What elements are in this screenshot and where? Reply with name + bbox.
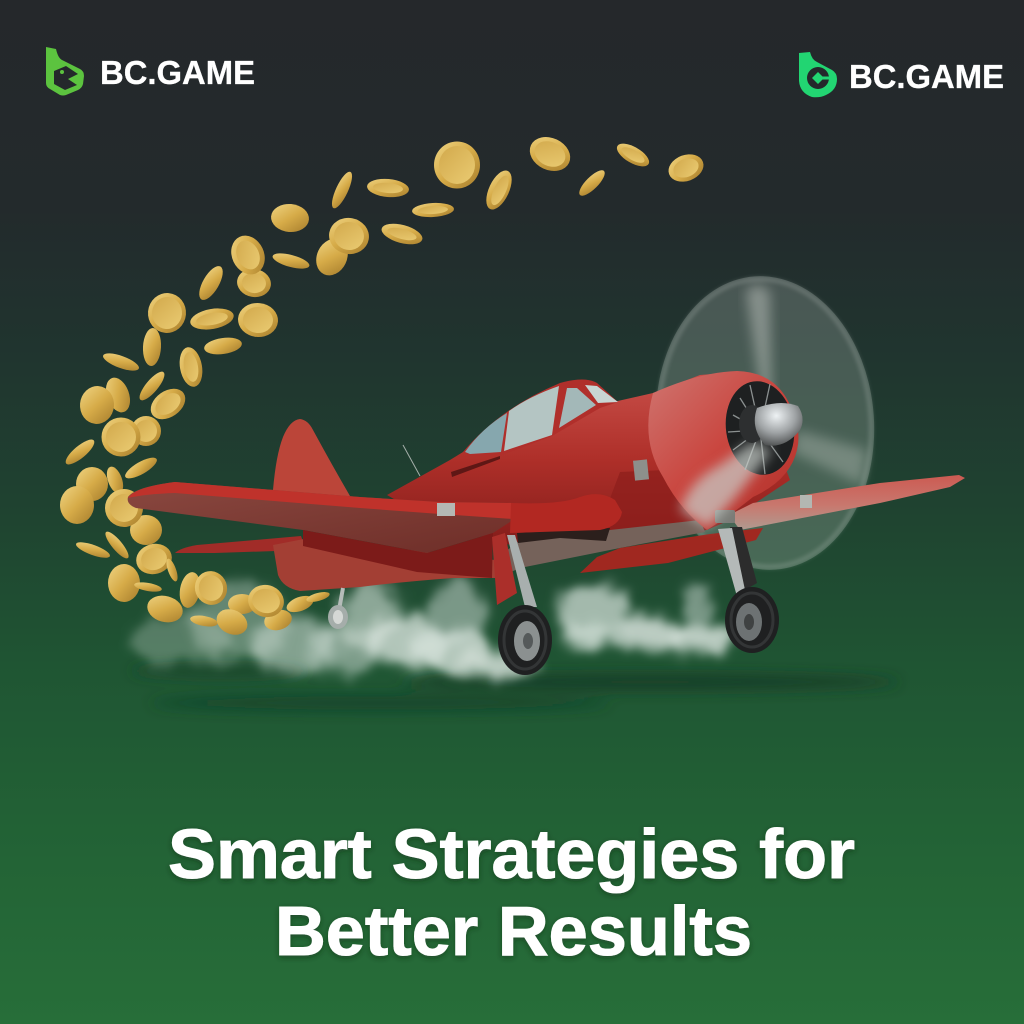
- rear fuselage below wing: [273, 538, 495, 591]
- wing root fairing: [510, 494, 622, 533]
- tailplane: [175, 536, 306, 553]
- spinner hub: [739, 403, 803, 446]
- right landing gear: [718, 527, 779, 653]
- belly slit: [517, 528, 610, 543]
- left wing underside: [128, 482, 513, 553]
- right wing: [729, 475, 965, 530]
- title: [168, 815, 855, 970]
- canopy: [463, 380, 618, 456]
- lower propeller blade blur: [680, 442, 772, 528]
- logo: BC.GAME left: BC.GAME: [100, 54, 255, 91]
- airplane: [128, 371, 965, 675]
- flap below wing: [303, 530, 493, 578]
- logo: BC.GAME right: [799, 52, 1004, 97]
- logo: BC.GAME right: BC.GAME: [849, 58, 1004, 95]
- antenna: [403, 445, 420, 476]
- title: Better Results: [275, 892, 752, 970]
- lower fuselage shade: [600, 470, 700, 537]
- fuselage panel line: [451, 456, 500, 477]
- wing hardpoint right: [800, 495, 812, 508]
- belly strip: [495, 520, 705, 578]
- left landing gear: [492, 533, 552, 675]
- ground shadow: [130, 665, 900, 710]
- right flap: [580, 528, 763, 573]
- fuselage: [387, 372, 790, 548]
- logo: BC.GAME left: [46, 47, 255, 96]
- propeller disc: [646, 269, 884, 577]
- tail fin: [273, 419, 350, 520]
- coin stream: [60, 131, 707, 640]
- left wing leading edge: [128, 482, 513, 519]
- wing hardpoint left: [437, 503, 455, 516]
- smoke trail: [130, 578, 738, 676]
- cowling: [648, 371, 798, 530]
- wing root box: [715, 510, 735, 523]
- engine opening: [720, 377, 800, 479]
- exhaust vent: [633, 459, 649, 481]
- engine fins: [728, 384, 783, 474]
- title: Smart Strategies for: [168, 815, 855, 893]
- tail wheel: [328, 588, 348, 629]
